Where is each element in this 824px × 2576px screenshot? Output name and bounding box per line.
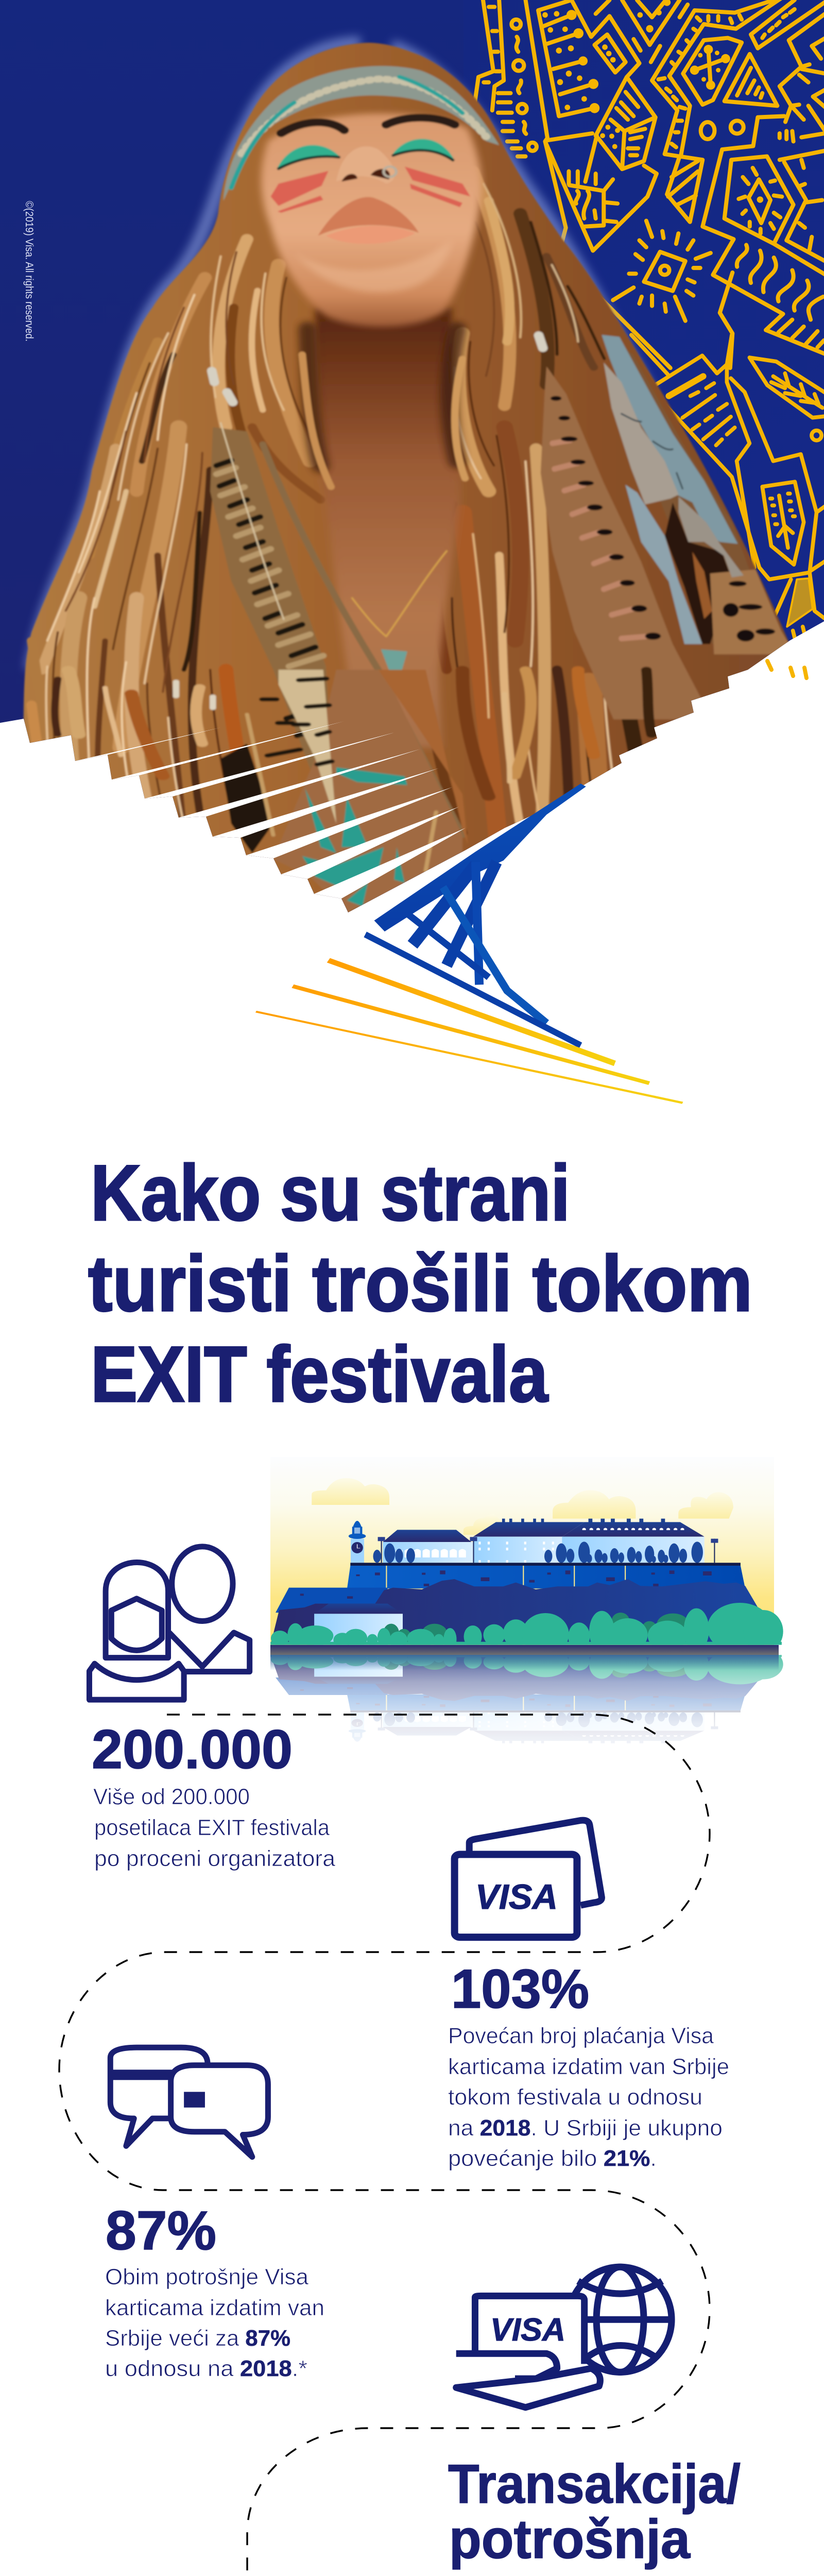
title: turisti trošili tokom — [88, 1240, 752, 1328]
stat: 87%: u odnosu na 2018.* — [105, 2356, 307, 2381]
stat: 103%: Povećan broj plaćanja Visa — [448, 2023, 714, 2048]
cord with necklace — [263, 444, 462, 835]
fortress scene — [270, 1457, 783, 1743]
stat: 103%: povećanje bilo 21%. — [448, 2146, 657, 2171]
heading: Transakcija/potrošnja: potrošnja — [449, 2508, 691, 2570]
gold doodle pattern — [475, 0, 824, 638]
war paint — [271, 166, 470, 213]
icon: visa cards — [455, 1820, 602, 1937]
clouds — [312, 1478, 733, 1535]
hero photo panel — [0, 0, 824, 940]
embroidered dress — [221, 670, 468, 912]
fine hair texture — [46, 184, 620, 846]
green eye shadow — [277, 139, 455, 168]
stat: 200.000: posetilaca EXIT festivala — [94, 1815, 330, 1840]
icon: visa card with globe and hand — [456, 2267, 672, 2408]
copyright line: ©(2019) Visa. All rights reserved. — [23, 201, 35, 342]
stat: 87% — [105, 2199, 324, 2381]
hair mass — [24, 43, 824, 940]
woman portrait — [24, 43, 824, 940]
icon: chat bubbles — [110, 2047, 268, 2157]
stat: 200.000 — [92, 1718, 336, 1871]
left feather — [210, 335, 543, 835]
headband — [224, 66, 499, 201]
icon: visa cards: VISA — [475, 1877, 558, 1917]
heading: Transakcija/potrošnja — [448, 2453, 741, 2570]
fortress with trees — [270, 1519, 783, 1655]
title: EXIT festivala — [91, 1330, 549, 1418]
right hair strands — [55, 670, 651, 797]
stat: 103%: karticama izdatim van Srbije — [448, 2054, 729, 2079]
stat: 87%: 87% — [106, 2199, 216, 2261]
blue ribbon graphic — [365, 784, 586, 1045]
stat: 200.000: Više od 200.000 — [93, 1784, 250, 1809]
heading: Transakcija/potrošnja: Transakcija/ — [448, 2453, 741, 2515]
lips — [318, 197, 419, 236]
hair beads — [212, 335, 543, 402]
reflection — [270, 1648, 783, 1743]
stat: 200.000: 200.000 — [92, 1718, 293, 1780]
stat: 87%: Obim potrošnje Visa — [105, 2264, 309, 2290]
sky — [270, 1457, 774, 1645]
stat: 103% — [448, 1958, 729, 2171]
hair halo — [31, 43, 649, 670]
stat: 200.000: po proceni organizatora — [94, 1846, 336, 1871]
neck and chest — [302, 308, 465, 748]
orange and yellow lines — [255, 958, 683, 1104]
stat: 103%: tokom festivala u odnosu — [448, 2084, 702, 2110]
stat: 103%: na 2018. U Srbiji je ukupno — [448, 2115, 723, 2141]
water band — [270, 1645, 779, 1655]
eyebrows — [281, 117, 455, 133]
yellow doodle remnant — [767, 661, 806, 678]
title — [88, 1149, 752, 1418]
title: Kako su strani — [91, 1149, 570, 1237]
stat: 87%: karticama izdatim van — [105, 2295, 324, 2320]
nose — [336, 146, 395, 184]
face — [224, 66, 499, 327]
icon: people — [89, 1547, 250, 1700]
dashed route line — [59, 1715, 710, 2576]
cloth and right feather — [541, 335, 795, 719]
stat: 103%: 103% — [451, 1958, 589, 2020]
icon: visa card with globe and hand: VISA — [490, 2312, 565, 2348]
stat: 87%: Srbije veći za 87% — [105, 2326, 290, 2351]
photo slits — [75, 721, 466, 899]
